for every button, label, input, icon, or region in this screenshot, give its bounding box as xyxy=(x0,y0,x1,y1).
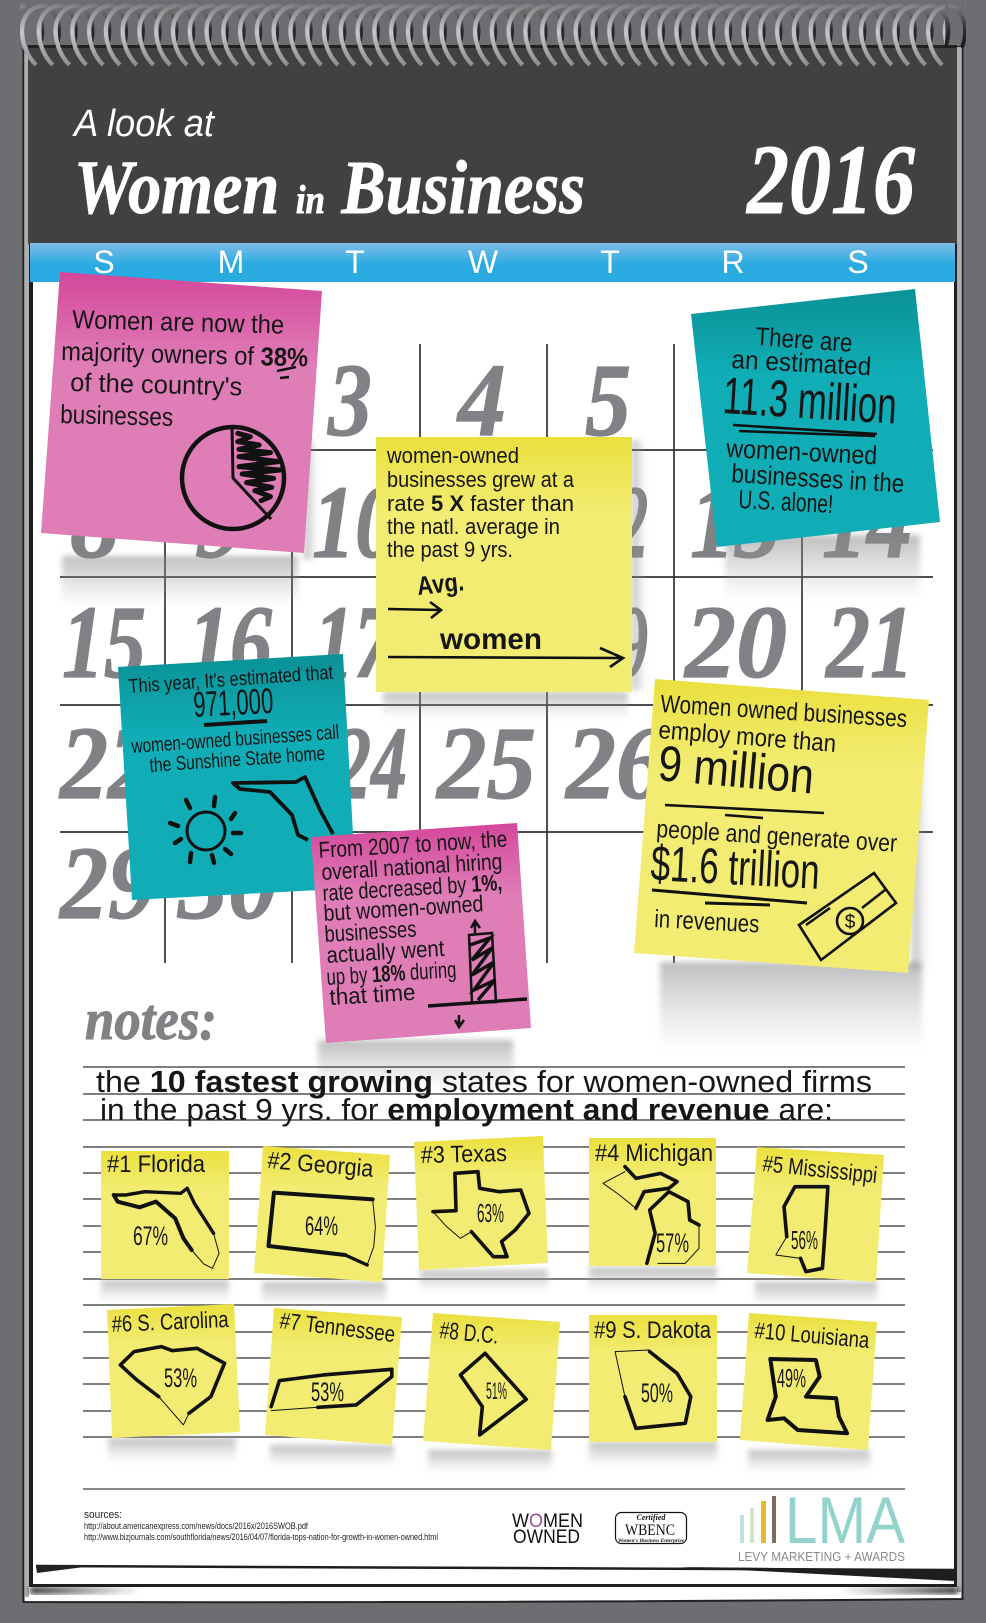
logo: Women Owned: WOMEN xyxy=(512,1511,583,1532)
note: #6 S. Carolina xyxy=(107,1304,240,1438)
calendar dates: 15 xyxy=(62,585,146,700)
icon: dollar bill xyxy=(799,873,896,960)
text: Sunshine State xyxy=(128,662,340,777)
text: Sunshine State: 971,000 xyxy=(192,680,274,725)
note: #10 Louisiana xyxy=(740,1313,877,1450)
note: #2 Georgia: 64% xyxy=(305,1211,338,1241)
text: employment and revenue xyxy=(649,690,908,938)
text: employment and revenue: people and generate over xyxy=(656,815,898,858)
note: #2 Georgia xyxy=(254,1146,390,1282)
sources: http://about.americanexpress.com/news/docs/2016x/2016SWOB.pdf xyxy=(84,1521,308,1531)
note: #5 Mississippi xyxy=(747,1147,884,1282)
note: #8 D.C.: #8 D.C. xyxy=(438,1317,500,1350)
text: majority owners: of the country's xyxy=(70,367,243,402)
icon: Florida and sun xyxy=(170,777,333,863)
weekday band: R xyxy=(721,244,745,280)
calendar dates: 26 xyxy=(564,706,666,821)
text: hiring rate: businesses xyxy=(324,915,417,947)
text: 11.3 million women-owned businesses xyxy=(721,321,905,519)
note: #6 S. Carolina: #6 S. Carolina xyxy=(111,1306,229,1337)
logo: WBENC certified: WBENC xyxy=(625,1522,675,1539)
text: hiring rate: actually went xyxy=(326,935,446,968)
calendar grid xyxy=(60,344,933,963)
text: growth rate: the natl. average in xyxy=(387,514,560,539)
calendar dates: 29 xyxy=(58,826,156,941)
text: majority owners: businesses xyxy=(60,399,174,432)
heading: notes: notes: xyxy=(85,987,217,1052)
text: hiring rate: From 2007 to now, the xyxy=(318,826,508,863)
text: employment and revenue: employ more than xyxy=(658,716,837,758)
text: employment and revenue: in revenues xyxy=(654,905,760,938)
chart: average vs women arrows: Avg. xyxy=(415,566,465,601)
logo: Women Owned: OWNED xyxy=(513,1527,580,1548)
text: hiring rate: overall national hiring xyxy=(321,848,503,885)
text: fastest growing states intro: in the past 9 yrs. for employment and revenue are: xyxy=(100,1092,833,1127)
note: #9 S. Dakota: 50% xyxy=(641,1378,673,1408)
text: hiring rate: rate decreased by 1%, xyxy=(322,869,503,906)
logo: WBENC certified xyxy=(616,1512,686,1544)
weekday band: T xyxy=(600,244,620,280)
chart: average vs women arrows xyxy=(388,566,623,667)
note: #3 Texas: 63% xyxy=(477,1198,504,1228)
note: #1 Florida: #1 Florida xyxy=(107,1151,206,1178)
title main: Women in Business: Women in Business xyxy=(74,146,585,230)
logo: LMA: LEVY MARKETING + AWARDS xyxy=(738,1549,905,1564)
note: #7 Tennessee: #7 Tennessee xyxy=(278,1307,397,1347)
note: #7 Tennessee: 53% xyxy=(311,1377,344,1407)
panel: 11.3 million xyxy=(691,289,940,547)
calendar dates: 12 xyxy=(590,465,648,580)
text: growth rate xyxy=(386,443,575,562)
sources: http://www.bizjournals.com/southflorida/news/2016/04/07/florida-tops-nation-for-growth-in-women-owned.html xyxy=(84,1532,438,1542)
chart: average vs women arrows: women xyxy=(439,623,542,656)
calendar dates: 24 xyxy=(334,706,407,821)
text: 11.3 million women-owned businesses: women-owned xyxy=(725,433,878,470)
text: growth rate: the past 9 yrs. xyxy=(387,537,513,562)
note: #3 Texas xyxy=(414,1136,548,1270)
note: #8 D.C. xyxy=(423,1313,560,1450)
calendar dates: 5 xyxy=(585,343,631,458)
note: #4 Michigan xyxy=(589,1138,716,1266)
calendar dates: 4 xyxy=(456,343,506,458)
text: 11.3 million women-owned businesses: U.S. alone! xyxy=(738,484,834,519)
calendar dates: 9 xyxy=(195,465,245,580)
note: #3 Texas: #3 Texas xyxy=(421,1140,507,1169)
text: fastest growing states intro: the 10 fastest growing states for women-owned firms xyxy=(96,1064,872,1099)
calendar dates: 25 xyxy=(435,706,536,821)
text: hiring rate: up by 18% during xyxy=(326,956,457,990)
note: #2 Georgia: #2 Georgia xyxy=(266,1147,375,1183)
note: #9 S. Dakota xyxy=(589,1315,717,1442)
text: majority owners: Women are now the xyxy=(72,304,285,340)
calendar dates: 14 xyxy=(822,465,912,580)
calendar dates: 30 xyxy=(177,826,278,941)
note: #6 S. Carolina: 53% xyxy=(164,1363,197,1393)
ruled lines xyxy=(83,1067,905,1489)
text: hiring rate: that time xyxy=(329,979,416,1010)
icon: rising bar xyxy=(428,921,527,1027)
calendar dates: 3 xyxy=(327,343,372,458)
text: employment and revenue: 9 million xyxy=(656,735,816,805)
calendar dates: 8 xyxy=(70,465,120,580)
note: #5 Mississippi: 56% xyxy=(791,1225,818,1255)
weekday band: M xyxy=(218,244,244,280)
weekday band: S xyxy=(847,244,869,280)
calendar dates: 21 xyxy=(824,585,914,700)
note: #10 Louisiana: 49% xyxy=(777,1363,806,1393)
title xyxy=(72,103,915,235)
panel: hiring rate xyxy=(311,823,531,1043)
calendar dates: 22 xyxy=(58,706,156,821)
weekday band xyxy=(30,243,955,282)
note: #10 Louisiana: #10 Louisiana xyxy=(754,1317,871,1353)
text: hiring rate xyxy=(318,826,508,1010)
logo: LMA xyxy=(738,1483,905,1564)
calendar dates: 17 xyxy=(314,585,397,700)
calendar dates: 13 xyxy=(690,465,780,580)
text: growth rate: women-owned xyxy=(386,443,519,468)
weekday band: S xyxy=(93,244,115,280)
text: fastest growing states intro xyxy=(96,1064,872,1127)
note: #9 S. Dakota: #9 S. Dakota xyxy=(594,1317,712,1344)
title line: A look at: A look at xyxy=(72,103,215,145)
panel: grew 5X faster xyxy=(376,437,632,692)
text: 11.3 million women-owned businesses: There are xyxy=(755,321,853,358)
note shadows, state row xyxy=(101,1267,877,1472)
text: 11.3 million women-owned businesses: businesses in the xyxy=(731,458,905,499)
logo: LMA: LMA xyxy=(785,1483,905,1557)
note: #8 D.C.: 51% xyxy=(486,1378,507,1405)
text: growth rate: rate 5 X faster than xyxy=(387,491,574,516)
text: majority owners xyxy=(60,304,309,432)
year: 2016 xyxy=(745,124,915,235)
icon: dollar bill: $ xyxy=(845,912,856,933)
note: #5 Mississippi: #5 Mississippi xyxy=(761,1150,879,1188)
note: #4 Michigan: #4 Michigan xyxy=(595,1140,713,1167)
note: #1 Florida: 67% xyxy=(133,1221,168,1251)
text: 11.3 million women-owned businesses: 11.3 million xyxy=(721,367,898,436)
calendar dates: 20 xyxy=(683,585,787,700)
note: #1 Florida xyxy=(101,1151,229,1279)
panel: 38% majority owners xyxy=(41,272,322,553)
text: growth rate: businesses grew at a xyxy=(387,467,575,492)
calendar dates xyxy=(58,343,914,941)
calendar dates: 19 xyxy=(585,585,648,700)
weekday band: T xyxy=(345,244,365,280)
text: majority owners: majority owners of 38% xyxy=(61,336,309,372)
logo: WBENC certified: Certified xyxy=(637,1513,666,1522)
calendar dates: 16 xyxy=(188,585,272,700)
text: Sunshine State: the Sunshine State home xyxy=(149,743,326,777)
dark calendar header xyxy=(28,45,957,244)
text: Sunshine State: women-owned businesses call xyxy=(130,722,340,758)
icon: pie chart xyxy=(182,367,296,529)
logo: WBENC certified: Women's Business Enterprise xyxy=(618,1538,685,1544)
note: #7 Tennessee xyxy=(265,1307,402,1445)
text: Sunshine State: This year, It's estimated that xyxy=(128,662,334,698)
spiral binding xyxy=(20,3,966,69)
shadows cast on calendar xyxy=(62,440,928,1090)
weekday band: W xyxy=(468,244,499,280)
text: 11.3 million women-owned businesses: an estimated xyxy=(731,344,872,381)
logo: Women Owned xyxy=(512,1511,583,1548)
sources: sources: xyxy=(84,1509,122,1521)
note: #4 Michigan: 57% xyxy=(656,1228,689,1258)
text: employment and revenue: $1.6 trillion xyxy=(649,835,821,900)
sources xyxy=(84,1509,438,1542)
calendar dates: 10 xyxy=(312,465,398,580)
panel: 9 million and $1.6 trillion xyxy=(634,679,929,973)
panel: 971,000 in Florida xyxy=(118,654,356,900)
text: hiring rate: but women-owned xyxy=(323,890,484,926)
text: employment and revenue: Women owned businesses xyxy=(660,690,908,733)
